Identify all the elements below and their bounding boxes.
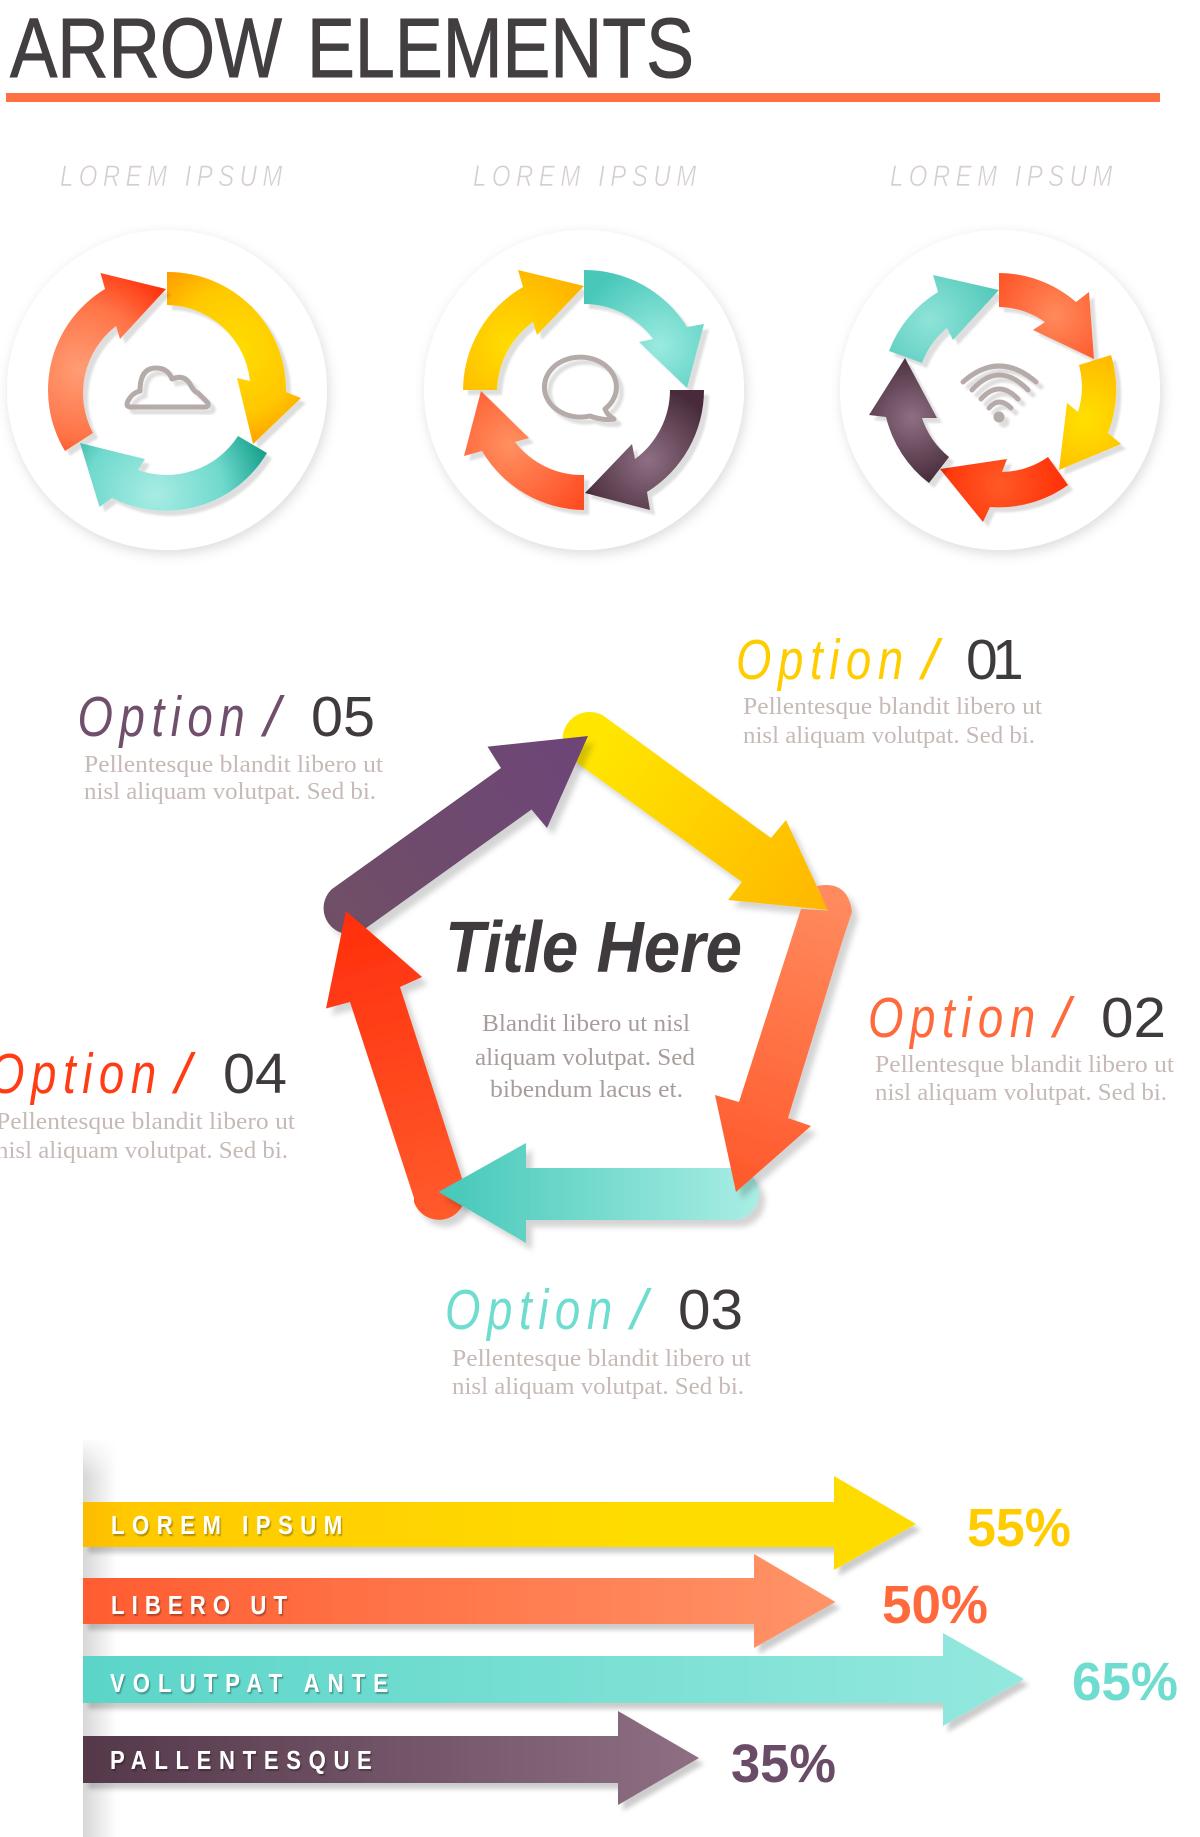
option 03: nisl aliquam volutpat. Sed bi. <box>452 1374 744 1400</box>
bar: volutpat ante 65%: VOLUTPAT ANTE <box>110 1669 388 1698</box>
heading: circle 2: LOREM IPSUM <box>473 158 697 193</box>
option 01: / <box>918 628 943 692</box>
arrow: yellow <box>167 272 301 444</box>
bar: pallentesque 35%: 35% <box>731 1734 836 1794</box>
option 02: / <box>1050 986 1075 1050</box>
option 04: / <box>171 1042 196 1106</box>
option 05: nisl aliquam volutpat. Sed bi. <box>84 779 376 805</box>
option 03: / <box>627 1278 652 1342</box>
option 02: 02 <box>1101 986 1166 1050</box>
arrow: dark plum <box>585 390 704 510</box>
arrow: orange <box>48 273 166 451</box>
bar: volutpat ante 65% <box>83 1633 1178 1726</box>
arrow: red <box>940 457 1068 522</box>
icon: speech bubble <box>544 357 616 420</box>
option 03: Option <box>445 1277 612 1341</box>
option 02: Option <box>868 985 1035 1049</box>
bar: pallentesque 35% <box>83 1711 836 1805</box>
heading: circle 3: LOREM IPSUM <box>890 158 1113 193</box>
option 04: Pellentesque blandit libero ut <box>0 1109 295 1135</box>
option 04 <box>0 1041 295 1164</box>
arrow: orange <box>999 273 1094 359</box>
option 03: 03 <box>678 1278 743 1342</box>
bar: volutpat ante 65%: 65% <box>1072 1652 1178 1712</box>
option 01: 01 <box>966 628 1024 692</box>
bar: lorem ipsum 55%: LOREM IPSUM <box>111 1511 342 1540</box>
option 05 <box>78 684 383 805</box>
bar: pallentesque 35%: PALLENTESQUE <box>110 1746 372 1775</box>
panel: three-arrow cycle with cloud <box>7 230 327 550</box>
option 01: nisl aliquam volutpat. Sed bi. <box>743 723 1035 749</box>
icon: cloud <box>127 368 208 407</box>
option 05: 05 <box>311 685 375 749</box>
arrow: teal <box>584 270 704 388</box>
center text block: bibendum lacus et. <box>490 1077 683 1103</box>
arrow: orange <box>715 885 852 1192</box>
arrow: yellow <box>563 712 828 910</box>
title <box>10 1 694 95</box>
arrow: teal <box>889 275 999 363</box>
option 05: / <box>260 685 285 749</box>
pentagon arrow diagram <box>324 712 852 1243</box>
center title: Title Here <box>445 908 742 988</box>
arrow: yellow <box>463 270 584 390</box>
bar chart: arrow bars <box>83 1436 1178 1837</box>
bar: libero ut 50%: LIBERO UT <box>111 1591 287 1620</box>
icon: wifi <box>963 366 1036 420</box>
panel: five-arrow cycle with wifi <box>840 230 1160 550</box>
center text block: aliquam volutpat. Sed <box>475 1045 695 1071</box>
option 01: Pellentesque blandit libero ut <box>743 694 1042 720</box>
option 05: Option <box>78 684 245 748</box>
bar: lorem ipsum 55% <box>83 1476 1071 1570</box>
arrow: teal <box>438 1143 759 1243</box>
heading: circle 1: LOREM IPSUM <box>60 158 283 193</box>
panel: four-arrow cycle with speech bubble <box>424 230 744 550</box>
bar: libero ut 50%: 50% <box>882 1575 988 1635</box>
option 03: Pellentesque blandit libero ut <box>452 1346 751 1372</box>
option 02: Pellentesque blandit libero ut <box>875 1052 1174 1078</box>
option 05: Pellentesque blandit libero ut <box>84 752 383 778</box>
option 01 <box>736 627 1042 749</box>
center text block: Blandit libero ut nisl <box>482 1011 690 1037</box>
title: ELEMENTS <box>307 1 694 95</box>
arrow: yellow <box>1059 355 1121 470</box>
option 04: nisl aliquam volutpat. Sed bi. <box>0 1138 288 1164</box>
option 01: Option <box>736 627 903 691</box>
arrow: teal <box>80 436 267 511</box>
arrow: dark plum <box>869 358 949 483</box>
bar: libero ut 50% <box>83 1554 988 1648</box>
option 02: nisl aliquam volutpat. Sed bi. <box>875 1080 1167 1106</box>
arrow: orange <box>464 391 584 510</box>
option 03 <box>445 1277 751 1400</box>
arrow: red <box>326 911 466 1220</box>
center text block <box>475 1011 695 1103</box>
title underline <box>6 93 1160 102</box>
option 04: 04 <box>223 1042 287 1106</box>
bar: lorem ipsum 55%: 55% <box>967 1498 1071 1558</box>
arrow: purple <box>324 736 588 934</box>
option 02 <box>868 985 1174 1106</box>
title: ARROW <box>10 1 282 95</box>
